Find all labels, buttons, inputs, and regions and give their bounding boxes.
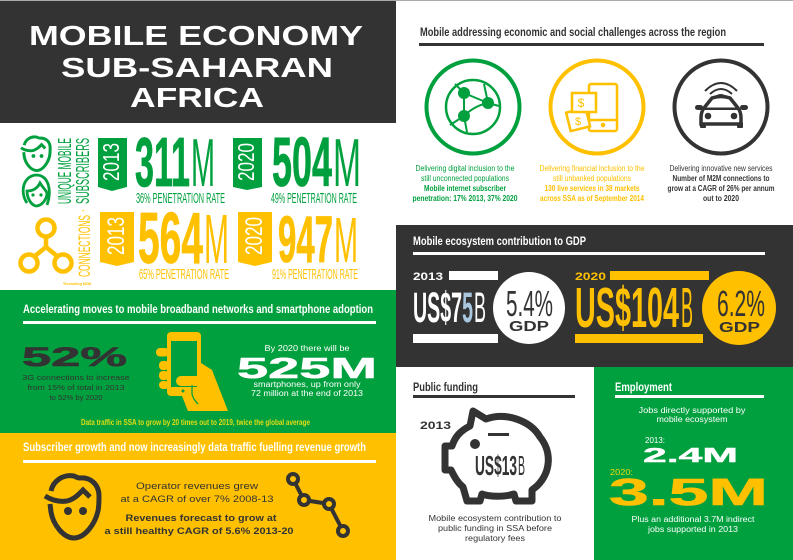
stat: 2013 GDP [413,271,498,343]
stat: 2020 GDP: 2020 [575,271,606,283]
stat: 52%: 52% [22,342,127,372]
stat: 2013 GDP: B [474,284,486,332]
icon: face [45,476,99,538]
connections label: CONNECTIONS [75,215,94,277]
stat: 2013 GDP: US$75 [413,284,473,332]
stat: 52%: 3G connections to increase [22,373,130,382]
stat: 2020 jobs [609,468,768,514]
text: jobs: Jobs directly supported by [638,406,746,415]
text: indirect jobs [632,515,755,534]
heading: public funding: Public funding [413,382,478,394]
stat: 52% [22,342,130,402]
heading: broadband: Accelerating moves to mobile broadband networks and smartphone adoption [23,304,373,316]
text: public funding: regulatory fees [465,534,525,543]
text: financial inclusion: 130 live services in 38 markets [544,184,640,193]
stat: 525M smartphones: 525M [237,353,377,385]
title panel: AFRICA [130,82,264,113]
heading: employment: Employment [615,382,672,394]
text: public funding: Mobile ecosystem contribution to [428,514,562,523]
text: indirect jobs: Plus an additional 3.7M indirect [632,515,755,524]
2013 connections stat: 564 [138,199,203,279]
subscribers label [55,138,93,204]
icon: piggy bank: US$13 [475,450,517,481]
circle: 6.2% GDP [702,271,776,345]
panel: subscribers and connections: M [204,200,229,278]
panel: subscribers and connections: M [334,204,358,276]
text: financial inclusion [540,164,645,203]
text: digital inclusion: penetration: 17% 2013, 37% 2020 [412,194,518,203]
text: financial inclusion: across SSA as of September 2014 [540,194,644,203]
2020 connections stat: 2020 [241,217,268,255]
text: revenue growth: a still healthy CAGR of 5.6% 2013-20 [104,526,294,537]
circle: 5.4% GDP: 5.4% [506,283,553,324]
stat: 52%: from 15% of total in 2013 [28,383,124,392]
icon: mobile money: $ [578,96,585,110]
text: revenue growth: at a CAGR of over 7% 2008-13 [120,494,274,505]
panel: subscribers and connections: 36% PENETRATION RATE [136,190,225,207]
icon: mobile money [550,60,644,154]
stat: 2013 jobs: 2.4M [643,445,738,467]
2013 subscribers stat: M [191,125,215,201]
label: 2013: 2013 [420,420,451,432]
panel: employment [594,367,793,560]
text: financial inclusion: still unbanked populations [553,174,631,183]
2020 subscribers stat: 504 [272,123,332,201]
circle: 5.4% GDP: GDP [509,318,549,335]
stat: 52%: to 52% by 2020 [50,393,102,402]
heading: subscriber growth: Subscriber growth and now increasingly data traffic fuelling revenue growth [23,442,366,454]
2013 subscribers stat: 311 [135,123,190,201]
stat: 2020 GDP: US$104 [575,276,679,340]
text: new services [668,164,774,203]
stat: 2020 GDP [575,271,709,343]
circle: 5.4% GDP [493,272,565,344]
panel: mobile broadband [0,290,396,433]
panel: subscribers and connections: 65% PENETRATION RATE [139,266,229,283]
heading: challenges: Mobile addressing economic and social challenges across the region [420,27,726,39]
title panel: MOBILE ECONOMY [29,20,363,51]
heading: GDP: Mobile ecosystem contribution to GDP [413,236,586,248]
text: digital inclusion: still unconnected populations [421,174,509,183]
text: digital inclusion [412,164,518,203]
connections label [63,210,94,286]
stat: 2020 GDP: B [681,276,693,340]
text: digital inclusion: Delivering digital inclusion to the [416,164,515,173]
text: public funding [428,514,562,543]
icon: piggy bank: B [518,450,525,481]
2020 connections stat [238,202,358,283]
text: new services: out to 2020 [703,194,739,203]
2020 subscribers stat [233,123,361,207]
2013 connections stat: 2013 [103,217,130,255]
text: new services: Number of M2M connections to [672,174,770,183]
text: revenue growth: Operator revenues grew [136,481,258,492]
text: 49% PENETRATION RATE [271,190,357,207]
panel: subscribers and connections [20,123,361,286]
stat: 2013 jobs: 2013: [645,436,665,445]
stat: 2013 GDP: 2013 [413,271,443,283]
icon: hand holding phone [156,332,228,411]
panel: subscriber growth [0,433,396,560]
connections label: *Excluding M2M [63,282,91,286]
text: financial inclusion: Delivering financial inclusion to the [540,164,645,173]
subscribers label: SUBSCRIBERS [73,138,93,204]
stat: 2013 jobs [643,436,738,467]
icon: male face [21,137,50,171]
icon: female face [23,175,49,206]
icon: globe network [426,60,520,154]
icon: connections nodes [20,220,72,272]
stat: 525M smartphones: By 2020 there will be [264,344,350,353]
circle: 6.2% GDP: GDP [719,319,760,336]
panel: economic and social challenges [412,27,774,203]
title panel: SUB-SAHARAN [61,52,333,83]
stat: 525M smartphones: 72 million at the end of 2013 [251,389,364,398]
text: 91% PENETRATION RATE [272,266,358,283]
text: jobs [638,406,746,424]
title panel [0,0,793,123]
text: digital inclusion: Mobile internet subscriber [424,184,506,193]
stat: 2020 jobs: 2020: [610,468,633,477]
2013 connections stat [100,199,229,283]
2013 subscribers stat: 2013 [98,143,124,181]
text: public funding: public funding in SSA before [438,524,553,533]
icon: mobile money: $ [575,116,581,128]
2013 subscribers stat [98,123,225,207]
text: revenue growth [104,481,294,537]
connections label: * [82,210,85,216]
icon: piggy bank [445,411,548,501]
stat: 525M smartphones: smartphones, up from only [254,380,360,389]
2020 subscribers stat: 2020 [233,143,259,181]
panel: public funding [413,382,575,543]
panel: GDP contribution [396,225,793,367]
text: jobs: mobile ecosystem [656,415,728,424]
stat: 2020 jobs: 3.5M [609,472,768,514]
icon: line graph [288,474,348,536]
note: data traffic: Data traffic in SSA to grow by 20 times out to 2019, twice the global average [81,417,310,427]
panel: subscribers and connections: UNIQUE MOBILE [55,138,75,204]
text: revenue growth: Revenues forecast to grow at [126,513,277,524]
text: M [333,125,361,201]
text: indirect jobs: jobs supported in 2013 [647,525,739,534]
2020 connections stat: 947 [278,202,333,276]
stat: 525M smartphones [237,344,377,398]
icon: connected car [674,60,768,154]
text: new services: Delivering innovative new services [670,164,772,173]
